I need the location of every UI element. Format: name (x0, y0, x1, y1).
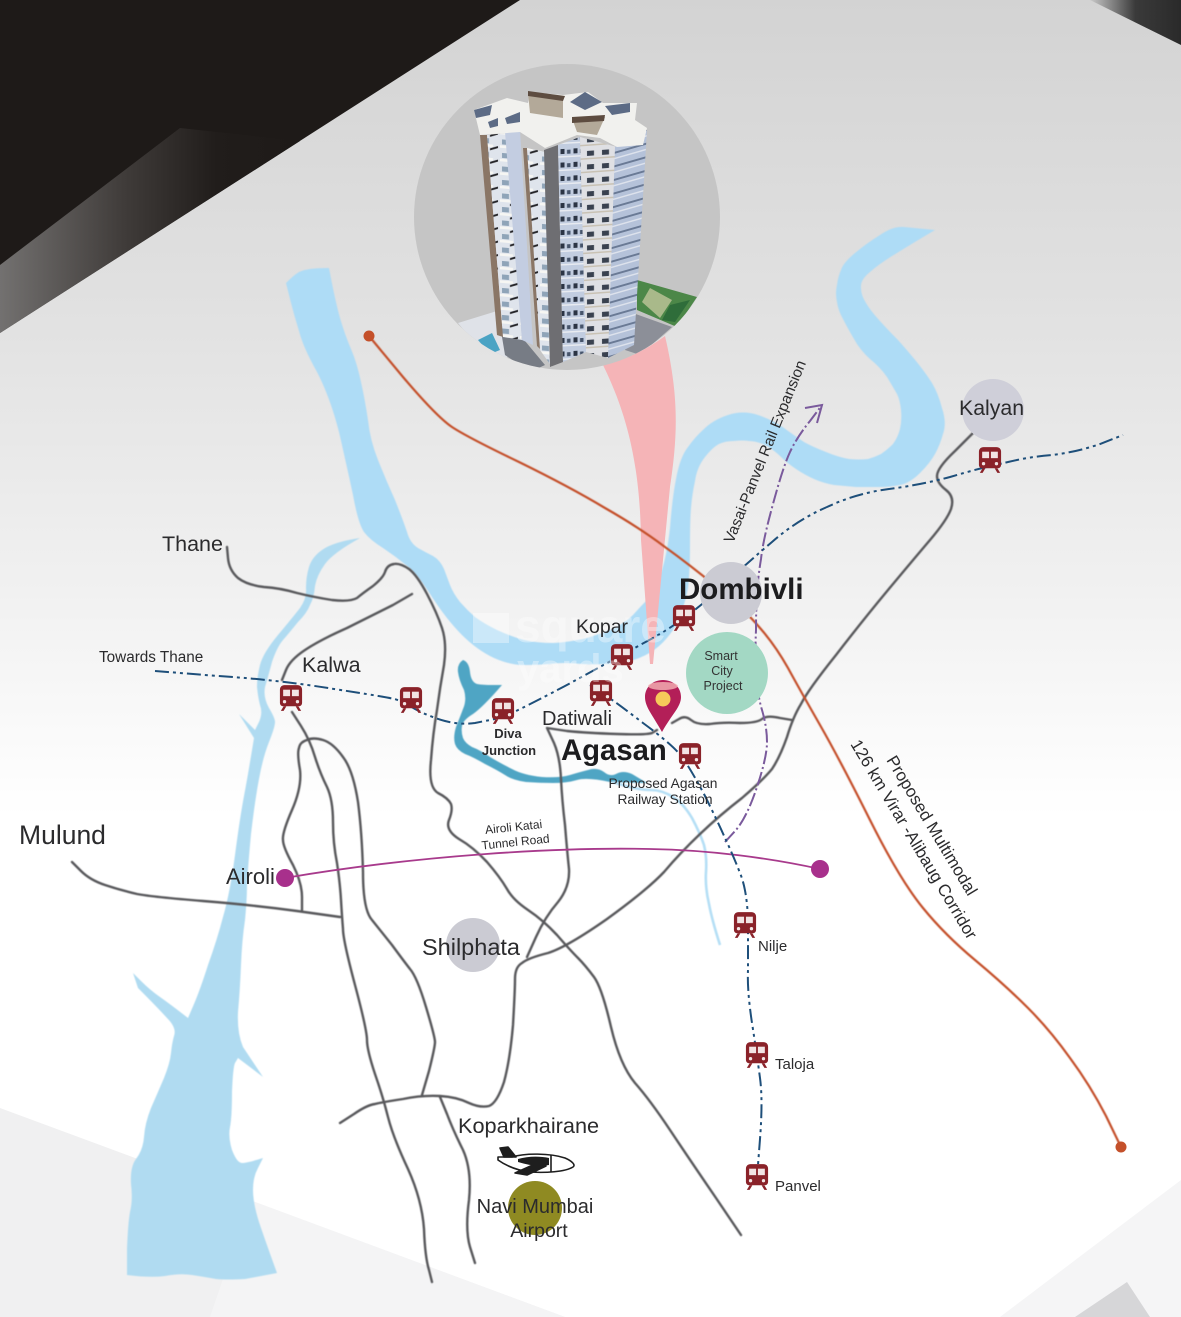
rail expansion arrow (725, 405, 822, 842)
place labels: Airoli (226, 864, 275, 889)
project tower photo (414, 64, 720, 372)
place labels: Airoli Katai (484, 817, 543, 837)
tower roof (474, 91, 647, 148)
pink pointer beam (603, 336, 676, 664)
place labels: Kalwa (302, 653, 361, 677)
place labels: Towards Thane (99, 649, 203, 666)
tower podium and garden (458, 280, 697, 372)
place labels: 126 km Virar -Alibaug Corridor (847, 736, 981, 943)
place labels: Koparkhairane (458, 1113, 599, 1138)
tower faces (480, 130, 647, 367)
smart city project: Smart (704, 649, 738, 663)
place labels: Shilphata (422, 934, 521, 960)
stream: south of Agasan (612, 782, 720, 945)
place labels: Dombivli (679, 573, 804, 606)
place labels (19, 358, 1024, 1242)
place labels: Proposed Agasan (609, 776, 717, 791)
place labels: Tunnel Road (481, 831, 550, 853)
rail line: Panvel (590, 685, 762, 1178)
place labels: Kalyan (959, 396, 1024, 420)
place labels: Panvel (775, 1178, 821, 1195)
place labels: Diva (494, 726, 522, 741)
place labels: Junction (482, 743, 536, 758)
place labels: Thane (162, 532, 223, 556)
watermark (473, 600, 666, 691)
place labels: Navi Mumbai (477, 1196, 593, 1218)
train icons (280, 447, 1001, 1190)
watermark: yards (517, 647, 624, 691)
tunnel road: Airoli-Katai (276, 849, 829, 887)
smart city project: City (711, 664, 734, 678)
corridor: Virar-Alibaug (364, 330, 1126, 1152)
rail line: central (155, 435, 1123, 724)
place labels: Nilje (758, 938, 787, 955)
city markers (446, 379, 1024, 1235)
place labels: Vasai-Panvel Rail Expansion (721, 358, 810, 545)
river: western creek (127, 538, 360, 1280)
place labels: Railway Station (617, 792, 713, 807)
place labels: Airport (510, 1220, 568, 1242)
place labels: Kopar (576, 616, 629, 638)
creek: Diva (454, 660, 647, 783)
place labels: Datiwali (542, 708, 612, 730)
location pin (645, 680, 681, 732)
icon: airplane (498, 1147, 574, 1175)
smart city project: Project (704, 679, 743, 693)
place labels: Mulund (19, 820, 106, 850)
roads (72, 433, 973, 1282)
watermark: square (515, 600, 666, 652)
place labels: Proposed Multimodal (883, 752, 981, 899)
river: main creek (286, 227, 945, 665)
place labels: Agasan (561, 734, 667, 767)
place labels: Taloja (775, 1056, 815, 1073)
smart city project (686, 632, 768, 714)
